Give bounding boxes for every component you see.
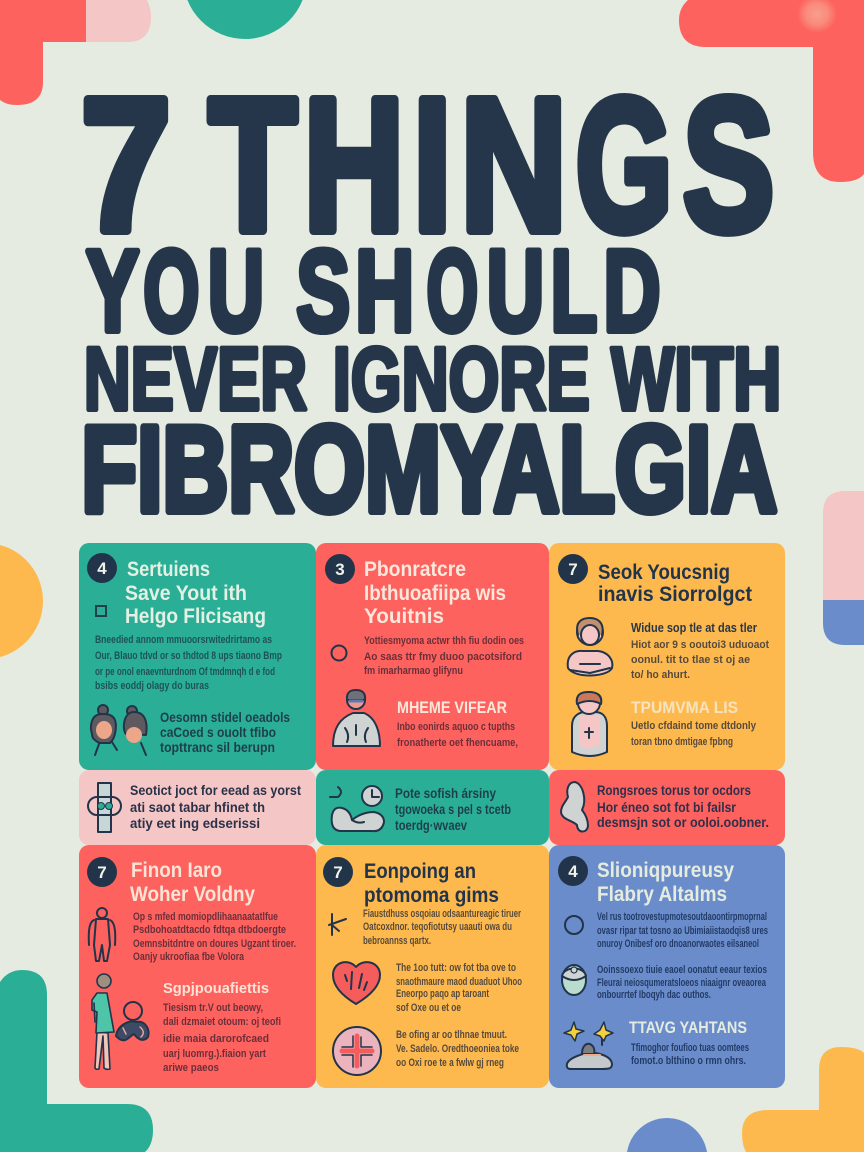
title: N (460, 60, 567, 271)
subheading: MHEME VIFEAR (397, 698, 507, 717)
title: NEVER (84, 328, 307, 428)
panel: coral card 7 (79, 845, 316, 1088)
strip text (597, 783, 769, 830)
body text (631, 639, 769, 681)
lead line: Widue sop tle at das tler (631, 620, 757, 635)
heading (597, 859, 734, 906)
strip text (130, 782, 301, 831)
text block: onbourrtef Iboqyh dac outhos. (597, 989, 711, 1001)
body text: ovasr ripar tat tosno ao Ubimiaiistaodqis8 ures (597, 925, 768, 937)
icon: stars and resting figure (564, 1022, 613, 1069)
text block: heart (396, 962, 522, 1014)
body text: Fiaustdhuss osqoiau odsaantureagic tiruer (363, 908, 522, 920)
panel: teal card 4 (79, 543, 316, 770)
number badge 4: 4 (568, 862, 578, 881)
heading: Woher Voldny (130, 883, 255, 906)
side note text (631, 720, 757, 748)
number badge 7: 7 (568, 560, 578, 579)
panel: teal strip (316, 770, 549, 845)
icon: cross in circle (333, 1027, 381, 1075)
icon: blob organ (561, 782, 588, 832)
title: I (413, 60, 452, 271)
number badge 7 (87, 857, 117, 887)
strip text: Seotict joct for eead as yorst (130, 782, 301, 798)
number badge 3 (325, 554, 355, 584)
heading: Flabry Altalms (597, 883, 727, 906)
heading: Seok Youcsnig (598, 561, 730, 584)
title (81, 60, 781, 537)
side note text (397, 721, 518, 749)
body text (597, 911, 768, 950)
title: WITH (611, 328, 781, 428)
strip text: atiy eet ing edserissi (130, 815, 260, 831)
text block: cross: Be ofing ar oo tlhnae tmuut. (396, 1029, 507, 1041)
subheading: TTAVG YAHTANS (629, 1018, 747, 1037)
text block: heart: sof Oxe ou et oe (396, 1002, 461, 1014)
decoration: top teal half circle (183, 0, 307, 39)
heading: Pbonratcre (364, 558, 466, 581)
panel: coral strip (549, 770, 785, 845)
number badge 7: 7 (97, 863, 107, 882)
body text: Oanjy ukroofiaa fbe Volora (133, 951, 245, 963)
body text: Oemnsbitdntre on doures Ugzant tiroer. (133, 938, 296, 950)
side note text: Tiesism tr.V out beowy, (163, 1002, 263, 1014)
decoration: top-right corner shape (679, 0, 864, 182)
decoration: right pill (823, 491, 864, 645)
icon: person with crossed arms (568, 618, 612, 676)
heading (364, 558, 506, 628)
icon: joint (88, 783, 121, 832)
text block: Ooinssoexo tiuie eaoel oonatut eeaur texios (597, 964, 767, 976)
text block: cross: Ve. Sadelo. Oredthoeoniea toke (396, 1043, 519, 1055)
icon: person bust (572, 692, 607, 756)
icon: arm and clock (330, 786, 384, 831)
title: U (487, 228, 544, 356)
side note text (631, 1042, 749, 1067)
text block: Fleurai neiosqumeratsloeos niaaignr oveaorea (597, 977, 767, 989)
side note text: Inbo eonirds aquoo c tupths (397, 721, 515, 733)
title: O (143, 228, 199, 356)
title: Y (86, 228, 139, 356)
body text: or pe onol enaevnturdnom Of tmdmnqh d e fod (95, 666, 275, 678)
text block: heart: snaothmaure maod duaduot Uhoo (396, 976, 522, 988)
strip text: Hor éneo sot fot bi failsr (597, 800, 737, 815)
body text: to/ ho ahurt. (631, 669, 690, 681)
body text: oonul. tit to tlae st oj ae (631, 654, 750, 666)
heading: Save Yout ith (125, 582, 247, 605)
title: U (208, 228, 264, 356)
side note text: uarj luomrg.).fiaion yart (163, 1048, 266, 1060)
body text: Our, Blauo tdvd or so thdtod 8 ups tiaono Bmp (95, 650, 282, 662)
panel: pink strip (79, 770, 316, 845)
panel: coral card 3 (316, 543, 549, 770)
decoration: left yellow half circle (0, 543, 43, 659)
icon: ring (332, 646, 346, 660)
number badge 3: 3 (335, 560, 345, 579)
side note text: toran tbno dmtigae fpbng (631, 736, 733, 748)
strip text: ati saot tabar hfinet th (130, 799, 265, 815)
title: 7 (81, 60, 171, 271)
body text: bsibs eoddj olagy do buras (95, 680, 209, 692)
side note text: dali dzmaiet otoum: oj teofi (163, 1016, 281, 1028)
heading (364, 860, 499, 907)
number badge 4 (87, 553, 117, 583)
decoration: bottom blue circle (626, 1118, 708, 1152)
heading (130, 859, 255, 906)
body text: onuroy Onibesf oro dnoanorwaotes eilsaneol (597, 938, 759, 950)
side note text (160, 709, 290, 755)
icon: person with glasses (333, 690, 380, 746)
body text: Hiot aor 9 s ooutoi3 uduoaot (631, 639, 769, 651)
icon: ring (565, 916, 583, 934)
body text: Vel rus tootrovestupmotesoutdaoontirpmoprnal (597, 911, 767, 923)
strip text (395, 786, 511, 833)
panel: yellow card 7 (549, 543, 785, 770)
heading (598, 561, 752, 606)
heading: Youitnis (364, 605, 444, 628)
strip text: Rongsroes torus tor ocdors (597, 783, 751, 798)
subheading: Sgpjpouafiettis (163, 980, 269, 997)
subheading: TPUMVMA LIS (631, 698, 738, 717)
side note text: topttranc sil berupn (160, 739, 275, 755)
decoration: top-left corner shapes (0, 0, 151, 105)
icon: small square (96, 606, 106, 616)
body text: bebroannss qartx. (363, 935, 431, 947)
decoration: bottom-right yellow shape (742, 1047, 864, 1152)
heading: Finon Iaro (131, 859, 222, 882)
number badge 7 (323, 857, 353, 887)
body text (363, 908, 522, 947)
heading: Ibthuoafiipa wis (364, 582, 506, 605)
panel: blue card 4 (549, 845, 785, 1088)
heading (125, 558, 266, 628)
side note text: fomot.o blthino o rmn ohrs. (631, 1055, 746, 1067)
body text (95, 634, 282, 692)
title: G (576, 60, 673, 271)
side note text: caCoed s ouolt tfibo (160, 724, 276, 740)
body text: Ao saas ttr fmy duoo pacotsiford (364, 651, 522, 663)
title: H (355, 228, 414, 356)
body text: Op s mfed momiopdlihaanaatatlfue (133, 911, 278, 923)
heading: Eonpoing an (364, 860, 476, 883)
side note text: fronatherte oet fhencuame, (397, 737, 518, 749)
icon: standing figure (89, 908, 115, 961)
heading: Sertuiens (127, 558, 210, 581)
body text (133, 911, 296, 963)
text block: cross (396, 1029, 519, 1069)
text block: cross: oo Oxi roe te a fwlw gj rneg (396, 1057, 504, 1069)
title: S (683, 60, 774, 271)
title: IGNORE (333, 328, 590, 428)
number badge 7: 7 (333, 863, 343, 882)
side note text (163, 1002, 281, 1074)
text block: heart: The 1oo tutt: ow fot tba ove to (396, 962, 516, 974)
side note text: idie maia darorofcaed (163, 1033, 269, 1045)
body text: Psdbohoatdtacdo fdtqa dtbdoergte (133, 924, 286, 936)
heading: inavis Siorrolgct (598, 583, 752, 606)
side note text: Oesomn stidel oeadols (160, 709, 290, 725)
number badge 4: 4 (97, 559, 107, 578)
icon: woman and child (92, 974, 148, 1069)
title: S (296, 228, 350, 356)
body text: fm imarharmao glifynu (364, 665, 463, 677)
body text: Oatcoxdnor. teqofiotutsy uaauti owa du (363, 921, 512, 933)
number badge 4 (558, 856, 588, 886)
title: T (209, 60, 297, 271)
icon: two women (91, 705, 147, 755)
title: O (427, 228, 478, 356)
text block: heart: Eneorpo paqo ap taroant (396, 988, 489, 1000)
side note text: Tfimoghor foufioo tuas oomtees (631, 1042, 749, 1054)
number badge 7 (558, 554, 588, 584)
strip text: Pote sofish ársiny (395, 786, 496, 801)
body text: Bneedied annom mmuoorsrwitedrirtamo as (95, 634, 272, 646)
side note text: ariwe paeos (163, 1062, 219, 1074)
text block (597, 964, 767, 1001)
strip text: desmsjn sot or ooloi.oobner. (597, 815, 769, 830)
title: D (604, 228, 660, 356)
heading: ptomoma gims (364, 884, 499, 907)
strip text: tgowoeka s pel s tcetb (395, 802, 511, 817)
body text: Yottiesmyoma actwr thh fiu dodin oes (364, 635, 524, 647)
strip text: toerdg·wvaev (395, 818, 467, 833)
panel: yellow card 7b (316, 845, 549, 1088)
icon: heart (333, 962, 380, 1004)
heading: Helgo Flicisang (125, 605, 266, 628)
title: H (304, 60, 404, 271)
body text (364, 635, 524, 677)
icon: pill jar (562, 965, 586, 995)
icon: small branch (329, 914, 346, 935)
heading: Slioniqpureusy (597, 859, 734, 882)
decoration: bottom-left teal shape (0, 970, 153, 1152)
title: L (551, 228, 597, 356)
side note text: Uetlo cfdaind tome dtdonly (631, 720, 757, 732)
